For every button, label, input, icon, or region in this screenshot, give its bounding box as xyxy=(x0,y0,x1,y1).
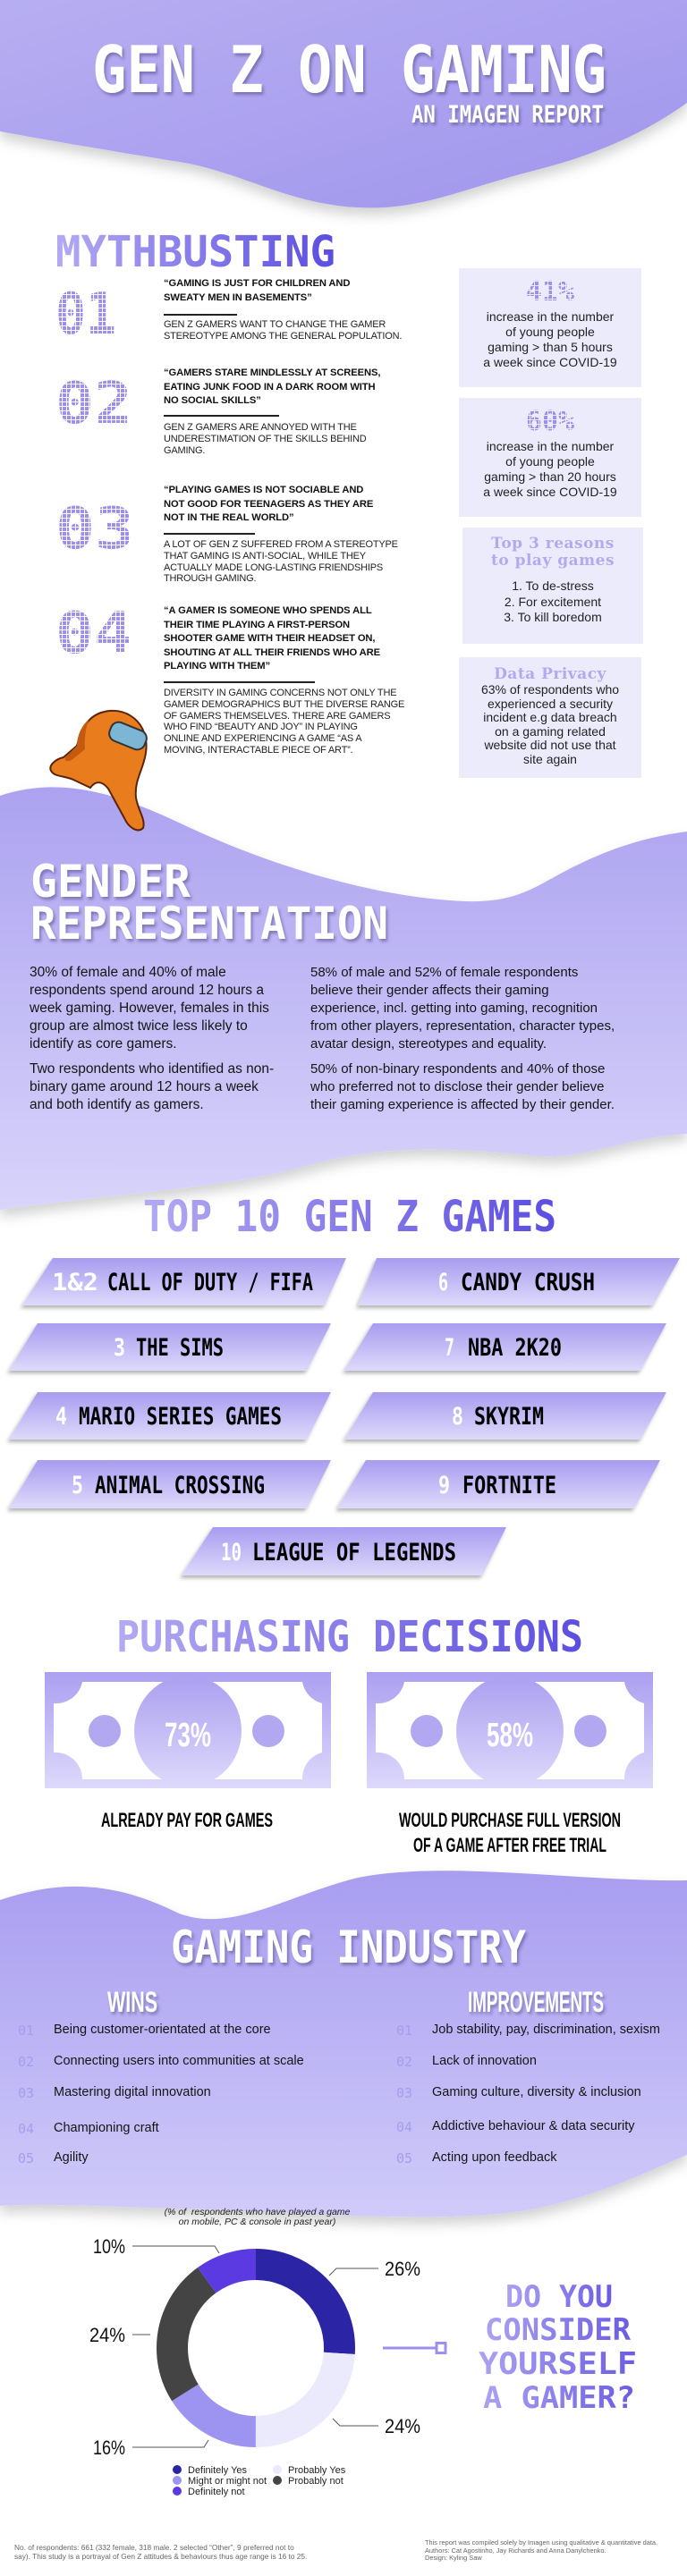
wins list: Agility xyxy=(54,2150,89,2165)
chart caption: on mobile, PC & console in past year) xyxy=(179,2217,335,2227)
callout: do you consider yourself a gamer: YOURSELF xyxy=(479,2346,637,2382)
improvements list: 01 xyxy=(396,2023,412,2039)
chart caption: (% of respondents who have played a game xyxy=(165,2207,350,2217)
gender text right: from other players, representation, character types, xyxy=(310,1018,615,1034)
gender text left: 30% of female and 40% of male xyxy=(30,965,226,980)
gender text right: 50% of non-binary respondents and 40% of those xyxy=(310,1061,605,1077)
wins list: 05 xyxy=(18,2150,34,2166)
wins list: 01 xyxy=(18,2023,34,2039)
legend: Probably Yes xyxy=(288,2465,346,2476)
game 6: 6 xyxy=(438,1269,448,1296)
stat box: 41%: a week since COVID-19 xyxy=(483,355,617,369)
myth 4: DIVERSITY IN GAMING CONCERNS NOT ONLY THE xyxy=(164,688,396,698)
heading: gender representation: GENDER xyxy=(30,856,191,908)
stat box: 41%: increase in the number xyxy=(487,309,614,324)
game 7: NBA 2K20 xyxy=(468,1334,562,1362)
game 8 xyxy=(344,1392,666,1440)
legend xyxy=(173,2465,346,2497)
myth numbers (dot matrix): 02 xyxy=(55,371,132,437)
box: data privacy: site again xyxy=(523,751,577,765)
donut chart: 24% xyxy=(89,2324,125,2346)
footer right: Design: Kyling Saw xyxy=(425,2554,482,2562)
gender text left: respondents spend around 12 hours a xyxy=(30,983,264,998)
myth 4: ONLINE AND EXPERIENCING A GAME “AS A xyxy=(164,733,361,744)
myth 4: GAMER DEMOGRAPHICS BUT THE DIVERSE RANGE xyxy=(164,699,404,710)
donut chart: 24% xyxy=(385,2415,420,2437)
game 10: 10 xyxy=(221,1539,242,1567)
stat box: 41%: of young people xyxy=(505,325,595,339)
gender text right: 58% of male and 52% of female respondents xyxy=(310,965,578,980)
myth 4: SHOUTING AT ALL THEIR FRIENDS WHO ARE xyxy=(164,647,380,658)
myth 3: NOT GOOD FOR TEENAGERS AS THEY ARE xyxy=(164,499,373,510)
game 10 xyxy=(182,1527,506,1575)
game 9: 9 xyxy=(438,1472,450,1499)
myth 4 xyxy=(164,605,404,756)
gender text right: who preferred not to disclose their gender believe xyxy=(310,1079,605,1094)
myth numbers (dot matrix): 01 xyxy=(55,282,116,348)
bill 58%: 58% xyxy=(487,1717,533,1754)
gender text left: binary game around 12 hours a week xyxy=(30,1079,259,1094)
game 6 xyxy=(358,1258,680,1305)
improvements list: 05 xyxy=(396,2150,412,2166)
gender text right: believe their gender affects their gaming xyxy=(310,983,549,998)
gender text right: their gaming experience is affected by their gender. xyxy=(310,1097,615,1112)
connector arrow xyxy=(383,2342,447,2354)
myth 2: “GAMERS STARE MINDLESSLY AT SCREENS, xyxy=(164,367,380,378)
money bills xyxy=(45,1672,653,1855)
footer right: This report was compiled solely by Imagen using qualitative & quantitative data. xyxy=(425,2538,657,2546)
donut chart: 26% xyxy=(385,2258,420,2280)
legend: Definitely not xyxy=(188,2487,245,2497)
myth 1: SWEATY MEN IN BASEMENTS” xyxy=(164,292,312,303)
gender text left: week gaming. However, females in this xyxy=(30,1001,269,1016)
footer right: Authors: Cat Agostinho, Jay Richards and Anna Danylchenko. xyxy=(425,2546,606,2554)
myth 2: GAMING. xyxy=(164,445,205,456)
box: top 3 reasons: Top 3 reasons xyxy=(491,535,615,553)
improvements list: Job stability, pay, discrimination, sexism xyxy=(432,2023,660,2037)
myth 4: MOVING, INTERACTABLE PIECE OF ART”. xyxy=(164,745,352,756)
improvements list: 04 xyxy=(396,2119,412,2135)
gender text right xyxy=(310,965,615,1112)
gender text left: and both identify as gamers. xyxy=(30,1097,204,1112)
improvements list: Addictive behaviour & data security xyxy=(432,2119,635,2133)
myth 3: A LOT OF GEN Z SUFFERED FROM A STEREOTYPE xyxy=(164,539,398,550)
donut chart: 10% xyxy=(93,2235,125,2258)
game 7: 7 xyxy=(445,1334,454,1362)
box: top 3 reasons: 3. To kill boredom xyxy=(504,610,602,624)
game 4: MARIO SERIES GAMES xyxy=(79,1403,282,1431)
wins list: 04 xyxy=(18,2121,34,2137)
myth 3 xyxy=(164,485,398,584)
box: data privacy: 63% of respondents who xyxy=(481,682,619,697)
myth 1: “GAMING IS JUST FOR CHILDREN AND xyxy=(164,278,350,289)
box: data privacy xyxy=(459,657,641,778)
myth 1: STEREOTYPE AMONG THE GENERAL POPULATION. xyxy=(164,331,402,342)
game 1&2: 1&2 xyxy=(52,1269,98,1296)
heading: gaming industry: GAMING INDUSTRY xyxy=(171,1921,526,1973)
stat box: 60% xyxy=(459,398,641,517)
game 3: THE SIMS xyxy=(136,1334,224,1362)
myth 3: “PLAYING GAMES IS NOT SOCIABLE AND xyxy=(164,485,363,495)
stat box: 60%: of young people xyxy=(505,454,595,469)
donut chart: 16% xyxy=(93,2437,125,2459)
caption: already pay: ALREADY PAY FOR GAMES xyxy=(101,1809,273,1831)
game 4: 4 xyxy=(55,1403,67,1431)
game 9 xyxy=(337,1460,660,1508)
game 10: LEAGUE OF LEGENDS xyxy=(252,1539,456,1567)
box: top 3 reasons: 2. For excitement xyxy=(505,594,601,608)
stat box: 41%: gaming > than 5 hours xyxy=(488,340,613,354)
donut chart xyxy=(89,2235,420,2459)
game 5: ANIMAL CROSSING xyxy=(95,1472,265,1499)
improvements list: Gaming culture, diversity & inclusion xyxy=(432,2085,641,2099)
myth 2: GEN Z GAMERS ARE ANNOYED WITH THE xyxy=(164,422,357,433)
myth 3: ACTUALLY MADE LONG-LASTING FRIENDSHIPS xyxy=(164,562,383,573)
improvements list: Lack of innovation xyxy=(432,2054,537,2068)
bill 58% xyxy=(367,1672,653,1788)
wins list: Championing craft xyxy=(54,2121,159,2135)
heading: gender representation xyxy=(30,856,389,948)
myth 2: UNDERESTIMATION OF THE SKILLS BEHIND xyxy=(164,434,367,444)
title: GEN Z ON GAMING xyxy=(92,32,606,107)
myth 2: NO SOCIAL SKILLS” xyxy=(164,395,261,406)
icon: among us character xyxy=(49,710,148,832)
callout: do you consider yourself a gamer: DO YOU xyxy=(505,2279,613,2315)
improvements list: Acting upon feedback xyxy=(432,2150,556,2165)
wins list: 03 xyxy=(18,2085,34,2101)
box: data privacy: incident e.g data breach xyxy=(483,710,617,724)
game 9: FORTNITE xyxy=(462,1472,556,1499)
box: data privacy: experienced a security xyxy=(488,696,613,710)
title: AN IMAGEN REPORT xyxy=(411,101,604,129)
legend: Definitely Yes xyxy=(188,2465,248,2476)
wins list: Being customer-orientated at the core xyxy=(54,2023,271,2037)
footer left: No. of respondents: 661 (332 female, 318 male. 2 selected “Other”, 9 preferred not to xyxy=(14,2543,294,2552)
callout: do you consider yourself a gamer: A GAMER? xyxy=(483,2380,635,2416)
myth 4: THEIR TIME PLAYING A FIRST-PERSON xyxy=(164,620,350,630)
box: top 3 reasons: 1. To de-stress xyxy=(512,579,594,593)
game 8: 8 xyxy=(452,1403,463,1431)
wins list: Mastering digital innovation xyxy=(54,2085,211,2099)
improvements list: 03 xyxy=(396,2085,412,2101)
stat box: 60%: gaming > than 20 hours xyxy=(484,469,616,484)
chart caption xyxy=(165,2207,350,2227)
myth numbers (dot matrix): 04 xyxy=(55,601,132,667)
myth numbers (dot matrix): 03 xyxy=(55,496,134,562)
game 5 xyxy=(9,1460,331,1508)
game 7 xyxy=(344,1323,666,1371)
game 1&2 xyxy=(22,1258,346,1305)
bill 73%: 73% xyxy=(165,1717,211,1754)
footer right xyxy=(425,2538,657,2562)
gender text right: avatar design, stereotypes and equality. xyxy=(310,1036,547,1052)
callout: do you consider yourself a gamer xyxy=(479,2279,637,2416)
game 5: 5 xyxy=(72,1472,83,1499)
stat box: 41% xyxy=(459,268,641,387)
myth 3: NOT IN THE REAL WORLD” xyxy=(164,512,294,523)
myth 2: EATING JUNK FOOD IN A DARK ROOM WITH xyxy=(164,382,376,393)
heading: gaming industry: WINS xyxy=(107,1986,157,2018)
myth 4: PLAYING WITH THEM” xyxy=(164,661,270,671)
myth 4: WHO FIND “BEAUTY AND JOY” IN PLAYING xyxy=(164,722,358,732)
myth 1 xyxy=(164,278,402,342)
myth 3: THROUGH GAMING. xyxy=(164,573,256,584)
caption: would purchase xyxy=(399,1809,621,1856)
legend: Might or might not xyxy=(188,2476,267,2487)
box: data privacy: on a gaming related xyxy=(495,724,606,739)
myth 4: SHOOTER GAME WITH THEIR HEADSET ON, xyxy=(164,633,375,644)
myth 1: GEN Z GAMERS WANT TO CHANGE THE GAMER xyxy=(164,319,386,330)
game 3: 3 xyxy=(114,1334,125,1362)
gender text left: group are almost twice less likely to xyxy=(30,1018,248,1034)
box: top 3 reasons xyxy=(462,528,643,644)
heading: mythbusting: MYTHBUSTING xyxy=(55,227,335,277)
gender text right: experience, incl. getting into gaming, recognition xyxy=(310,1001,598,1016)
box: data privacy: website did not use that xyxy=(484,738,616,752)
game 4 xyxy=(9,1392,331,1440)
game 6: CANDY CRUSH xyxy=(461,1269,595,1296)
game 8: SKYRIM xyxy=(474,1403,544,1431)
top 10 games banners xyxy=(6,1258,680,1581)
gender text left xyxy=(30,965,274,1112)
improvements list xyxy=(396,2023,660,2166)
callout: do you consider yourself a gamer: CONSIDER xyxy=(485,2312,632,2348)
box: top 3 reasons: to play games xyxy=(491,552,615,570)
improvements list: 02 xyxy=(396,2054,412,2070)
myth 4: “A GAMER IS SOMEONE WHO SPENDS ALL xyxy=(164,605,372,616)
game 3 xyxy=(9,1323,331,1371)
wins list xyxy=(18,2023,304,2166)
myth numbers (dot matrix) xyxy=(55,282,134,667)
legend: Probably not xyxy=(288,2476,344,2487)
footer left: say). This study is a portrayal of Gen Z attitudes & behaviours thus age range is 16 to 25. xyxy=(14,2552,307,2561)
footer left xyxy=(14,2543,307,2561)
bill 73% xyxy=(45,1672,331,1788)
gender text left: Two respondents who identified as non- xyxy=(30,1061,274,1077)
myth 2 xyxy=(164,367,380,456)
wins list: 02 xyxy=(18,2054,34,2070)
myth 4: OF GAMERS THEMSELVES. THERE ARE GAMERS xyxy=(164,711,390,722)
game 1&2: CALL OF DUTY / FIFA xyxy=(107,1269,313,1296)
gender text left: identify as core gamers. xyxy=(30,1036,177,1052)
stat box: 60%: increase in the number xyxy=(487,439,614,453)
box: data privacy: Data Privacy xyxy=(494,665,606,683)
myth 3: THAT GAMING IS ANTI-SOCIAL, WHILE THEY xyxy=(164,551,366,562)
stat box: 60%: a week since COVID-19 xyxy=(483,485,617,499)
heading: gaming industry xyxy=(107,1921,606,2018)
wins list: Connecting users into communities at scale xyxy=(54,2054,304,2068)
